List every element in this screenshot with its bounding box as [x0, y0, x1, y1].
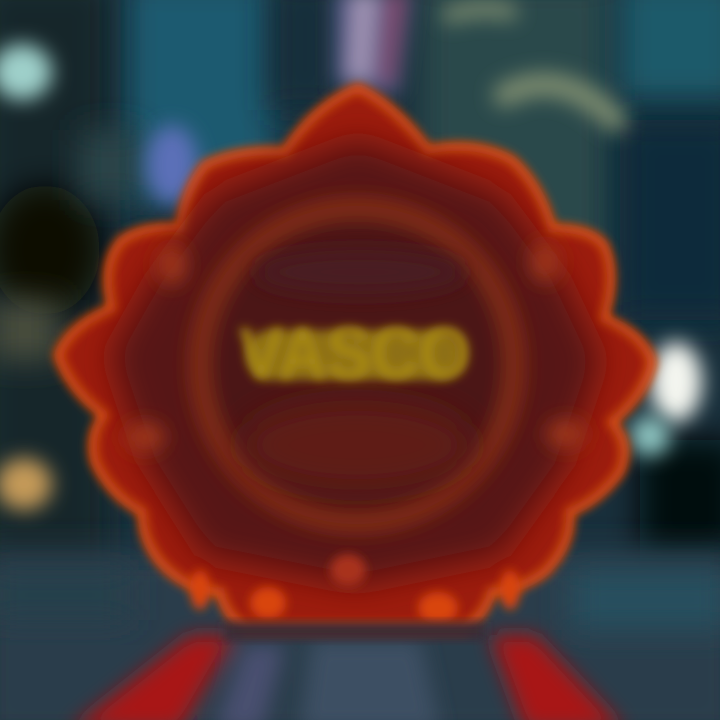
seal dark maroon body — [110, 140, 600, 585]
inner ring — [199, 207, 515, 523]
centre shade upper — [255, 250, 465, 294]
element: left orange light — [0, 458, 52, 510]
element: top-left bright light — [0, 44, 52, 100]
element: pale curved sign top right — [450, 9, 615, 120]
small emblem at bottom — [330, 554, 366, 586]
side studs — [125, 242, 586, 451]
bottom orange studs — [190, 570, 520, 624]
label: badge text: VASCO — [239, 314, 471, 394]
centre shade lower — [242, 400, 472, 490]
panel: scalloped seal badge — [58, 88, 652, 628]
seal orange edge — [58, 88, 652, 628]
seal red rim — [58, 88, 652, 628]
element: red ribbons at bottom — [70, 635, 625, 720]
element: striped flag behind the badge — [335, 0, 412, 95]
element: right white glow — [630, 342, 702, 456]
element: bottom dark fade under the seal — [225, 622, 485, 640]
